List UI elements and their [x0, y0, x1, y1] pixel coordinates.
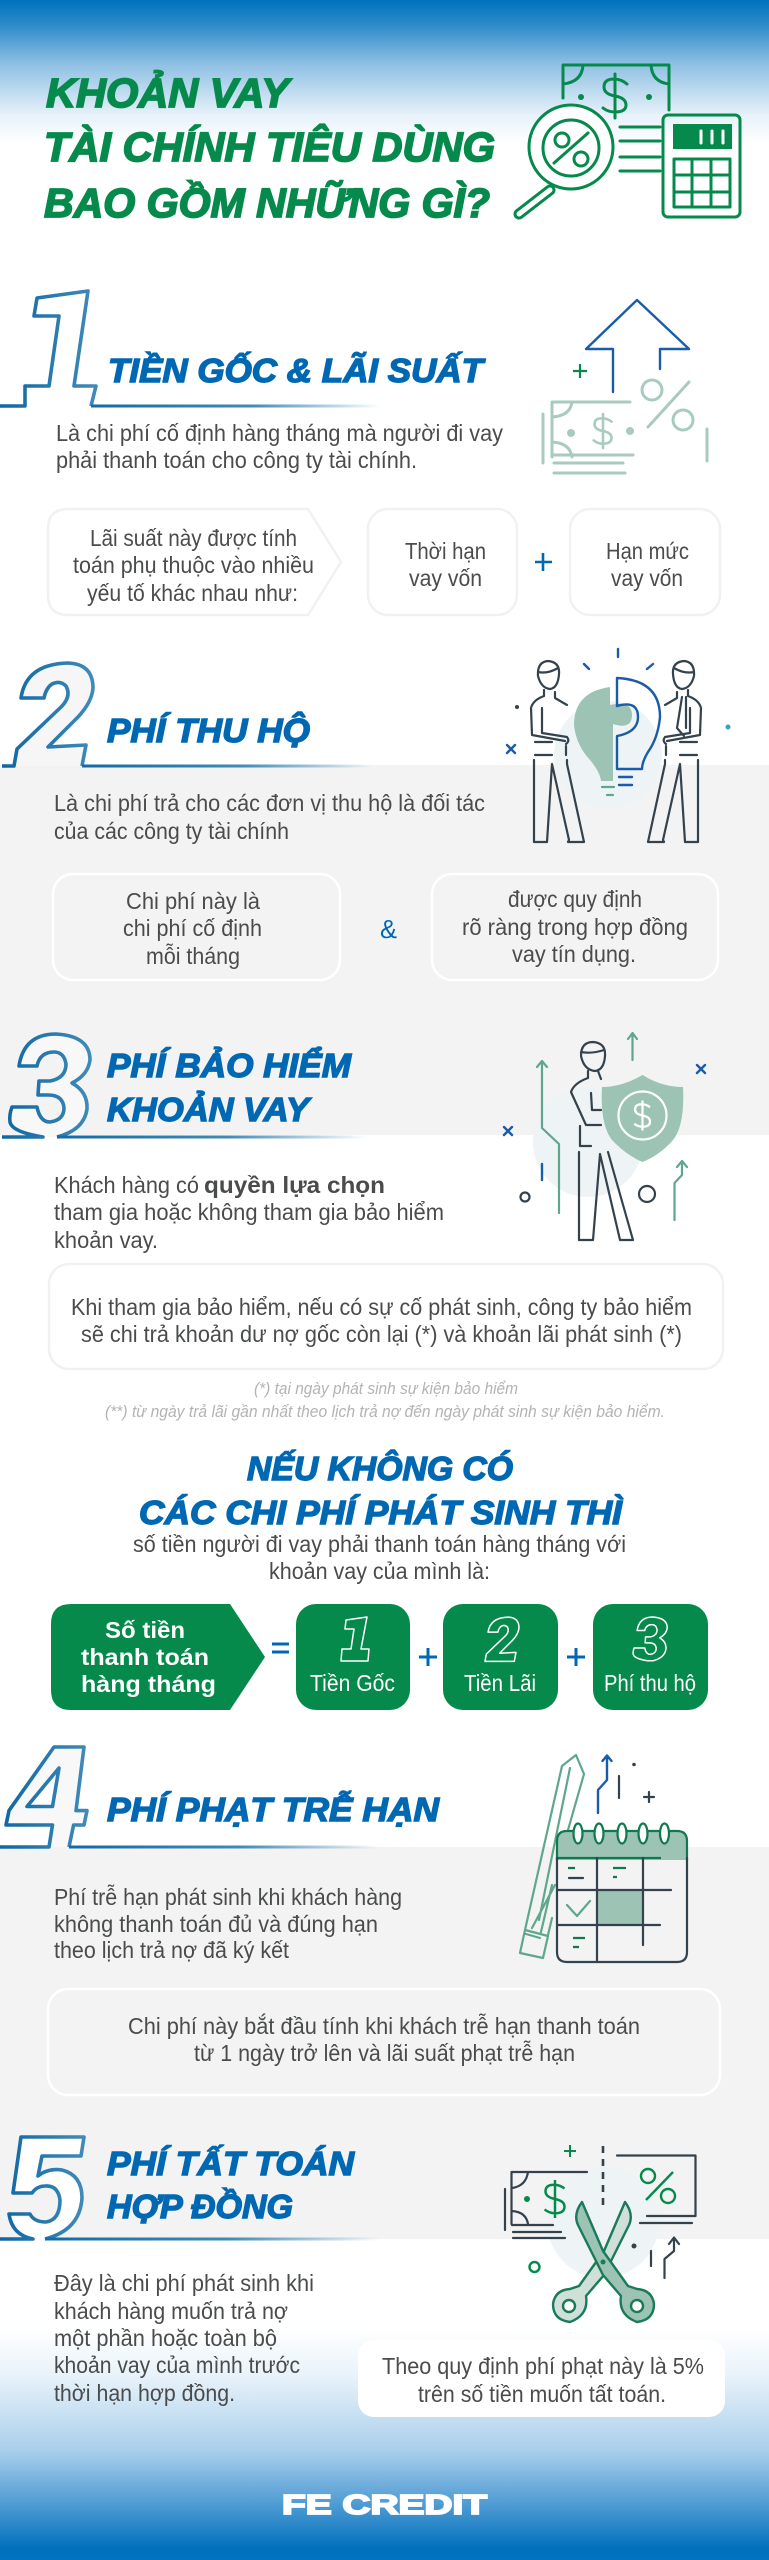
box: fixed monthly cost [53, 874, 340, 980]
heading line [69, 1846, 379, 1848]
description: thời hạn hợp đồng. [54, 2380, 235, 2406]
grey band behind section 4 [0, 1847, 769, 2239]
numeral 3 [2, 1034, 90, 1137]
numeral 2 [2, 663, 93, 766]
icon: arrow, money and percent [543, 300, 707, 473]
box: fixed monthly cost: chi phí cố định [123, 915, 262, 941]
box: collection fee: Phí thu hộ [604, 1670, 696, 1696]
description [54, 790, 485, 844]
box: collection fee [593, 1604, 708, 1710]
heading [107, 2145, 355, 2225]
section 2: collection fee [2, 649, 730, 980]
heading: HỢP ĐỒNG [107, 2188, 293, 2225]
bottom gradient background [0, 2328, 769, 2560]
heading line [45, 2238, 380, 2240]
arrow box: monthly payment [51, 1604, 265, 1710]
plus sign [419, 1648, 437, 1666]
ampersand: & [380, 914, 397, 944]
callout: 5 percent penalty: trên số tiền muốn tất toán. [418, 2381, 666, 2407]
callout: 5 percent penalty [358, 2340, 725, 2417]
heading [107, 1047, 353, 1128]
description: Khách hàng có [54, 1172, 199, 1198]
description: Là chi phí cố định hàng tháng mà người đi vay [56, 420, 503, 446]
description: Phí trễ hạn phát sinh khi khách hàng [54, 1884, 402, 1910]
title: BAO GỒM NHỮNG GÌ? [44, 180, 490, 226]
heading line [91, 404, 381, 408]
heading: TIỀN GỐC & LÃI SUẤT [108, 351, 486, 389]
equals sign [272, 1644, 289, 1652]
icon: pencil and calendar [520, 1755, 687, 1962]
description: Đây là chi phí phát sinh khi [54, 2270, 314, 2296]
description [54, 1172, 444, 1253]
arrow box: monthly payment: Số tiền [105, 1617, 185, 1643]
box: loan term [368, 509, 517, 615]
numeral 4 [0, 1747, 87, 1847]
top gradient background [0, 0, 769, 143]
subheading [133, 1531, 626, 1584]
callout: insurance pays remaining debt: sẽ chi trả khoản dư nợ gốc còn lại (*) và khoản lãi phát sinh (*) [81, 1321, 682, 1347]
heading: PHÍ BẢO HIỂM [107, 1047, 353, 1084]
section 1: principal and interest [0, 291, 720, 615]
callout: interest depends on factors: toán phụ thuộc vào nhiều [73, 552, 314, 578]
logo: FE CREDIT: FE CREDIT [282, 2489, 487, 2520]
description: một phần hoặc toàn bộ [54, 2325, 277, 2351]
title: KHOẢN VAY [46, 70, 293, 116]
box: principal: Tiền Gốc [310, 1670, 395, 1696]
description: phải thanh toán cho công ty tài chính. [56, 447, 417, 473]
heading: NẾU KHÔNG CÓ [247, 1449, 513, 1487]
box: principal [296, 1604, 410, 1710]
grey band behind section 2 [0, 765, 769, 1135]
box: loan term: vay vốn [409, 565, 482, 591]
box: defined in contract: vay tín dụng. [512, 941, 636, 967]
box: defined in contract: được quy định [508, 886, 642, 912]
subheading: số tiền người đi vay phải thanh toán hàng tháng với [133, 1531, 626, 1557]
callout: insurance pays remaining debt: Khi tham gia bảo hiểm, nếu có sự cố phát sinh, công ty bảo hiểm [71, 1294, 692, 1320]
plus sign [535, 553, 552, 571]
section 5: early settlement fee [0, 2137, 725, 2417]
icon: scissors cutting money and percent [505, 2145, 696, 2322]
title: TÀI CHÍNH TIÊU DÙNG [44, 124, 495, 170]
icon: two men with light bulb puzzle [507, 649, 730, 842]
description: khoản vay. [54, 1227, 158, 1253]
heading: PHÍ TẤT TOÁN [107, 2145, 355, 2182]
numeral 1 [0, 291, 96, 406]
description: khoản vay của mình trước [54, 2352, 300, 2378]
box: fixed monthly cost: Chi phí này là [126, 888, 260, 914]
heading: PHÍ THU HỘ [107, 711, 310, 749]
numeral 5 [0, 2137, 84, 2239]
description: khách hàng muốn trả nợ [54, 2298, 288, 2324]
icon: money, magnifier and calculator [519, 65, 740, 217]
box: interest [443, 1604, 558, 1710]
description: tham gia hoặc không tham gia bảo hiểm [54, 1199, 444, 1225]
box: loan limit: vay vốn [611, 565, 683, 591]
heading line [57, 1136, 367, 1138]
arrow box: monthly payment: hàng tháng [81, 1671, 216, 1697]
box: when the fee starts [48, 1989, 720, 2095]
footnotes [105, 1379, 665, 1421]
box: interest: Tiền Lãi [464, 1670, 536, 1696]
arrow box: monthly payment: thanh toán [81, 1644, 209, 1670]
description: quyền lựa chọn [204, 1172, 385, 1198]
box: when the fee starts: từ 1 ngày trở lên và lãi suất phạt trễ hạn [194, 2040, 575, 2066]
heading: PHÍ PHẠT TRỄ HẠN [107, 1791, 440, 1828]
box: loan limit [570, 509, 720, 615]
heading [139, 1449, 624, 1531]
footnotes: (**) từ ngày trả lãi gần nhất theo lịch trả nợ đến ngày phát sinh sự kiện bảo hiểm. [105, 1402, 665, 1421]
icon: man with shield [504, 1033, 705, 1240]
callout: interest depends on factors [48, 509, 341, 615]
description [54, 1884, 402, 1963]
footnotes: (*) tại ngày phát sinh sự kiện bảo hiểm [254, 1379, 518, 1398]
plus sign [567, 1648, 585, 1666]
box: fixed monthly cost: mỗi tháng [146, 943, 240, 969]
description [54, 2270, 314, 2406]
section 3: loan insurance fee [2, 1033, 723, 1421]
callout: insurance pays remaining debt [49, 1264, 723, 1369]
box: when the fee starts: Chi phí này bắt đầu tính khi khách trễ hạn thanh toán [128, 2013, 640, 2039]
title [44, 70, 495, 226]
description: của các công ty tài chính [54, 818, 289, 844]
subheading: khoản vay của mình là: [269, 1558, 490, 1584]
callout: interest depends on factors: Lãi suất này được tính [90, 525, 297, 551]
section 4: late payment fee [0, 1747, 720, 2095]
description [56, 420, 503, 473]
summary section: no additional costs [51, 1449, 708, 1710]
callout: interest depends on factors: yếu tố khác nhau như: [87, 580, 298, 606]
description: Là chi phí trả cho các đơn vị thu hộ là đối tác [54, 790, 485, 816]
callout: 5 percent penalty: Theo quy định phí phạt này là 5% [382, 2353, 704, 2379]
heading: KHOẢN VAY [107, 1091, 312, 1128]
box: defined in contract [432, 874, 718, 980]
heading line [82, 764, 372, 768]
description: không thanh toán đủ và đúng hạn [54, 1911, 378, 1937]
description: theo lịch trả nợ đã ký kết [54, 1937, 290, 1963]
heading: CÁC CHI PHÍ PHÁT SINH THÌ [139, 1494, 624, 1531]
box: loan limit: Hạn mức [606, 538, 689, 564]
box: defined in contract: rõ ràng trong hợp đồng [462, 914, 688, 940]
box: loan term: Thời hạn [405, 538, 486, 564]
